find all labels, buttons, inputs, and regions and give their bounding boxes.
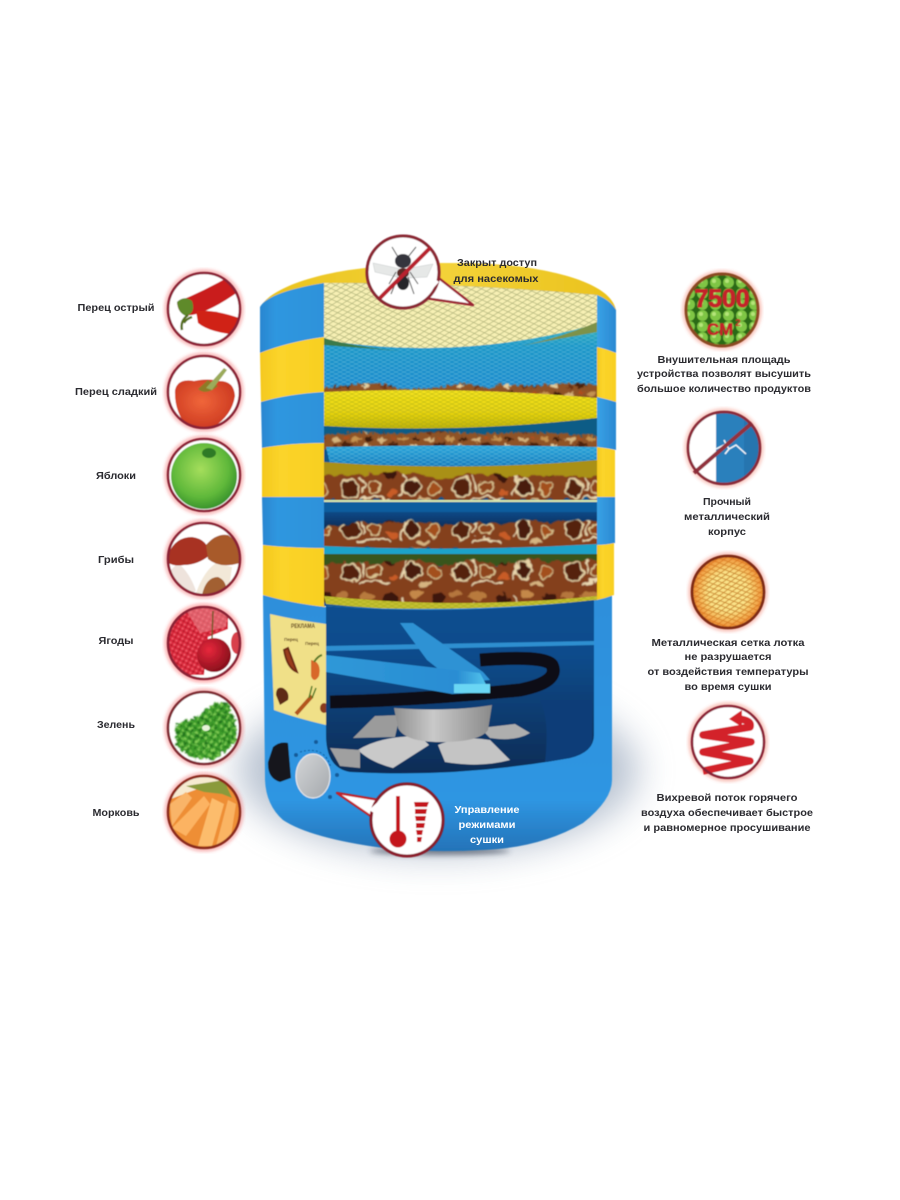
label: control: сушки (470, 834, 504, 846)
lower blade (326, 655, 490, 694)
poster label: РЕКЛАМА (291, 624, 316, 630)
switch (268, 742, 291, 782)
belt (330, 658, 553, 702)
dark blue gap (324, 512, 597, 530)
text: durable body: Прочный (703, 496, 751, 508)
label: carrots: Морковь (92, 807, 140, 819)
callout icon: thermostat (337, 784, 443, 856)
text: area: Внушительная площадь (658, 354, 791, 366)
poster label: Перец (284, 637, 298, 642)
icon: carrots (166, 774, 242, 850)
text: metal mesh: не разрушается (684, 651, 772, 663)
text: metal mesh: во время сушки (684, 681, 772, 693)
label: control (454, 804, 520, 846)
background shadow under dryer (238, 685, 638, 855)
text: durable body: корпус (708, 526, 746, 538)
text: area: большое количество продуктов (637, 383, 812, 395)
label: insects: для насекомых (454, 273, 539, 285)
label: mushrooms: Грибы (98, 554, 134, 566)
tray blue line (324, 544, 597, 556)
text: area: устройства позволят высушить (637, 368, 812, 380)
label: control: Управление (454, 804, 520, 816)
icon: 7500 cm2 (684, 272, 760, 348)
icon: 7500 cm2: СМ (707, 320, 733, 339)
fan chamber (320, 600, 600, 780)
icon: mushrooms (166, 521, 242, 597)
icon: durable body (686, 410, 762, 486)
icon: hot air vortex (690, 704, 766, 780)
icon: berries (166, 605, 243, 681)
text: hot air vortex (641, 792, 813, 834)
fan blades (330, 715, 530, 768)
icon: 7500 cm2: 2 (735, 318, 741, 329)
motor (394, 705, 492, 742)
tray band blue (324, 322, 597, 395)
label: greens: Зелень (97, 719, 136, 731)
cutaway window with trays (318, 280, 603, 620)
plate (326, 641, 594, 651)
food layer 4 (318, 520, 603, 549)
tray olive (324, 460, 597, 482)
text: metal mesh (648, 637, 809, 693)
icon: greens (166, 690, 242, 766)
right stripes (597, 295, 616, 600)
left stripes (260, 283, 325, 607)
icon: metal mesh (690, 554, 766, 630)
label: apples: Яблоки (96, 470, 136, 482)
text: hot air vortex: Вихревой поток горячего (656, 792, 798, 804)
control knob (294, 740, 339, 799)
label: sweet pepper: Перец сладкий (75, 386, 157, 398)
label: control: режимами (458, 819, 516, 831)
top rim (260, 263, 616, 330)
food layer 1 (320, 383, 600, 402)
text: metal mesh: от воздействия температуры (648, 666, 809, 678)
olive gap (324, 554, 597, 566)
upper blade (400, 623, 490, 683)
text: area (637, 354, 812, 395)
text: hot air vortex: воздуха обеспечивает быстрое (641, 807, 813, 819)
dryer body (260, 263, 616, 851)
callout icon: no insects (367, 236, 473, 308)
label: insects: Закрыт доступ (457, 257, 537, 269)
food layer 2 (320, 431, 600, 449)
food layer 5 (318, 560, 603, 606)
yellow mesh tray (324, 596, 597, 611)
tray band yellow (324, 390, 597, 431)
label: insects (454, 257, 539, 285)
poster label (270, 614, 328, 725)
text: metal mesh: Металлическая сетка лотка (652, 637, 805, 649)
icon: apple (166, 437, 242, 513)
tray band blue 2 (326, 446, 597, 468)
icon: sweet pepper (166, 354, 242, 430)
text: durable body: металлический (684, 511, 770, 523)
poster label: Перец (305, 641, 319, 646)
icon: 7500 cm2: 7500 (694, 285, 750, 313)
label: berries: Ягоды (98, 635, 134, 647)
lower body (263, 595, 612, 851)
icon: hot pepper (166, 271, 242, 347)
text: hot air vortex: и равномерное просушивание (644, 822, 811, 834)
top mesh (324, 280, 597, 350)
label: hot pepper: Перец острый (78, 302, 154, 314)
dark gap (323, 417, 598, 435)
text: durable body (684, 496, 770, 538)
food layer 3 (318, 472, 603, 500)
